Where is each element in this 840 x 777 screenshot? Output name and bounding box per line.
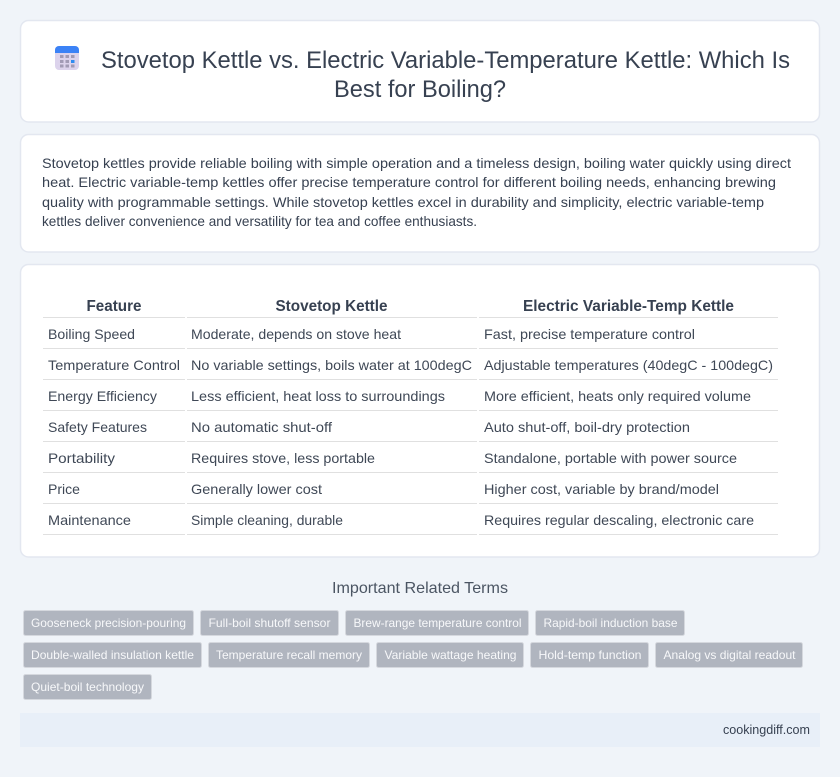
chip: gooseneck bbox=[24, 610, 194, 636]
intro paragraph: heat. Electric variable-temp kettles offer precise temperature control for different boiling needs, enhancing brewing bbox=[42, 174, 776, 190]
table header: Stovetop Kettle bbox=[276, 298, 388, 315]
row: portability: Standalone, portable with power source bbox=[484, 450, 737, 466]
chip: rapid-boil: Rapid-boil induction base bbox=[544, 616, 678, 630]
chip: variable wattage: Variable wattage heating bbox=[384, 648, 516, 662]
row: safety features bbox=[48, 419, 690, 435]
row: maintenance: Maintenance bbox=[48, 512, 131, 528]
row: temperature control: No variable settings, boils water at 100degC bbox=[191, 357, 472, 373]
chip: variable wattage bbox=[376, 642, 524, 668]
chip: rapid-boil bbox=[536, 610, 684, 636]
chip: analog vs digital: Analog vs digital readout bbox=[664, 648, 796, 662]
row: portability bbox=[48, 450, 737, 466]
heading: important related terms: Important Related Terms bbox=[332, 580, 508, 597]
row: safety features: Auto shut-off, boil-dry protection bbox=[484, 419, 690, 435]
panel: title header bbox=[20, 20, 820, 122]
chip: gooseneck: Gooseneck precision-pouring bbox=[31, 616, 186, 630]
chip: brew-range: Brew-range temperature control bbox=[354, 616, 522, 630]
title text: Best for Boiling? bbox=[334, 76, 506, 103]
icon: calendar bbox=[55, 46, 79, 70]
row: price: Higher cost, variable by brand/model bbox=[484, 481, 719, 497]
chip: temperature recall bbox=[208, 642, 370, 668]
row: temperature control bbox=[48, 357, 773, 373]
title text: Stovetop Kettle vs. Electric Variable-Temperature Kettle: Which Is bbox=[101, 47, 790, 74]
footer: cookingdiff.com bbox=[723, 723, 810, 737]
row: temperature control: Adjustable temperatures (40degC - 100degC) bbox=[484, 357, 773, 373]
row: boiling speed: Fast, precise temperature control bbox=[484, 326, 695, 342]
chip: hold-temp bbox=[530, 642, 648, 668]
row: temperature control: Temperature Control bbox=[48, 357, 180, 373]
chip: double-walled: Double-walled insulation kettle bbox=[31, 648, 194, 662]
chip: analog vs digital bbox=[656, 642, 802, 668]
chip: hold-temp: Hold-temp function bbox=[538, 648, 642, 662]
chip: quiet-boil: Quiet-boil technology bbox=[31, 680, 144, 694]
chip: temperature recall: Temperature recall memory bbox=[216, 648, 362, 662]
row: price bbox=[48, 481, 719, 497]
row: portability: Portability bbox=[48, 450, 115, 466]
chip: brew-range bbox=[346, 610, 528, 636]
row: price: Price bbox=[48, 481, 80, 497]
intro paragraph: Stovetop kettles provide reliable boiling with simple operation and a timeless design, boiling water quickly using direct bbox=[42, 155, 791, 171]
intro paragraph: quality with programmable settings. While stovetop kettles excel in durability and simplicity, electric variable-temp bbox=[42, 194, 764, 210]
row: boiling speed: Moderate, depends on stove heat bbox=[191, 326, 401, 342]
table header: Electric Variable-Temp Kettle bbox=[523, 298, 734, 315]
table header: Feature bbox=[86, 298, 142, 315]
related term chips bbox=[24, 610, 802, 700]
row: maintenance: Requires regular descaling, electronic care bbox=[484, 512, 754, 528]
row: price: Generally lower cost bbox=[191, 481, 322, 497]
row: energy efficiency: Less efficient, heat loss to surroundings bbox=[191, 388, 445, 404]
row: energy efficiency: Energy Efficiency bbox=[48, 388, 157, 404]
row: safety features: No automatic shut-off bbox=[191, 419, 332, 435]
row: boiling speed: Boiling Speed bbox=[48, 326, 135, 342]
row: maintenance: Simple cleaning, durable bbox=[191, 512, 343, 528]
intro paragraph: kettles deliver convenience and versatility for tea and coffee enthusiasts. bbox=[42, 213, 477, 229]
row: portability: Requires stove, less portable bbox=[191, 450, 375, 466]
row: maintenance bbox=[48, 512, 754, 528]
panel: introduction bbox=[20, 134, 820, 252]
chip: full-boil: Full-boil shutoff sensor bbox=[208, 616, 330, 630]
chip: full-boil bbox=[200, 610, 338, 636]
chip: quiet-boil bbox=[24, 674, 152, 700]
row: boiling speed bbox=[48, 326, 695, 342]
chip: double-walled bbox=[24, 642, 202, 668]
row: energy efficiency bbox=[48, 388, 751, 404]
footer bbox=[20, 713, 820, 747]
table header bbox=[86, 298, 734, 315]
row: energy efficiency: More efficient, heats only required volume bbox=[484, 388, 751, 404]
row: safety features: Safety Features bbox=[48, 419, 147, 435]
panel: comparison table bbox=[20, 264, 820, 557]
